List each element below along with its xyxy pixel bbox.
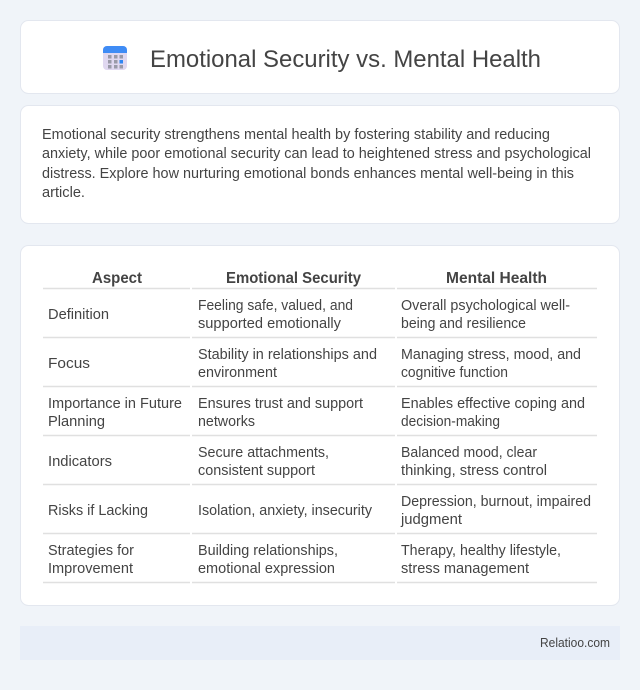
row: definition: Definition: [48, 307, 109, 323]
row: risks if lacking: judgment: [400, 512, 462, 528]
row: importance in future planning: decision-making: [401, 414, 500, 430]
row: risks if lacking: [48, 494, 591, 528]
row: risks if lacking: Isolation, anxiety, insecurity: [198, 503, 373, 519]
footer: [20, 626, 620, 660]
row: importance in future planning: networks: [198, 414, 255, 430]
table header: [92, 270, 547, 287]
intro text: anxiety, while poor emotional security can lead to heightened stress and psychological: [42, 146, 591, 162]
row: importance in future planning: Planning: [48, 414, 105, 430]
table header: Aspect: [92, 270, 143, 287]
row: indicators: Balanced mood, clear: [401, 445, 537, 461]
row: indicators: [48, 445, 547, 479]
row: importance in future planning: Importance in Future: [48, 396, 182, 412]
row: strategies for improvement: emotional expression: [198, 561, 335, 577]
row: indicators: Indicators: [48, 454, 112, 470]
icon: calendar: [103, 46, 127, 70]
intro text: [42, 127, 591, 201]
table header: Mental Health: [446, 270, 547, 287]
row: strategies for improvement: [48, 543, 561, 577]
table header: Emotional Security: [226, 270, 361, 287]
row: importance in future planning: [48, 396, 585, 430]
row: focus: environment: [198, 365, 277, 381]
row: risks if lacking: Depression, burnout, impaired: [401, 494, 591, 510]
intro text: Emotional security strengthens mental health by fostering stability and reducing: [42, 127, 550, 143]
row: strategies for improvement: Therapy, healthy lifestyle,: [401, 543, 561, 559]
row: definition: Feeling safe, valued, and: [198, 298, 353, 314]
row: focus: cognitive function: [401, 365, 508, 381]
row: focus: Managing stress, mood, and: [401, 347, 581, 363]
row: focus: Stability in relationships and: [198, 347, 377, 363]
row: risks if lacking: Risks if Lacking: [48, 503, 148, 519]
intro text: article.: [42, 185, 85, 201]
row: definition: Overall psychological well-: [401, 298, 570, 314]
panel: title: [20, 20, 620, 94]
row: indicators: Secure attachments,: [198, 445, 329, 461]
row: strategies for improvement: Improvement: [48, 561, 133, 577]
row: indicators: consistent support: [198, 463, 315, 479]
row: focus: Focus: [48, 356, 90, 372]
panel: introduction: [20, 106, 620, 224]
row: importance in future planning: Ensures trust and support: [198, 396, 363, 412]
footer brand: Relatioo.com: [540, 636, 610, 650]
row: definition: being and resilience: [401, 316, 526, 332]
title text: Emotional Security vs. Mental Health: [150, 46, 541, 73]
row: definition: [48, 298, 570, 332]
row: importance in future planning: Enables effective coping and: [401, 396, 585, 412]
row: definition: supported emotionally: [198, 316, 342, 332]
intro text: distress. Explore how nurturing emotional bonds enhances mental well-being in this: [42, 166, 574, 182]
row: focus: [48, 347, 581, 381]
row: strategies for improvement: stress management: [401, 561, 529, 577]
panel: comparison table: [20, 246, 620, 606]
row: indicators: thinking, stress control: [401, 463, 547, 479]
row: strategies for improvement: Building relationships,: [198, 543, 338, 559]
row: strategies for improvement: Strategies for: [48, 543, 134, 559]
